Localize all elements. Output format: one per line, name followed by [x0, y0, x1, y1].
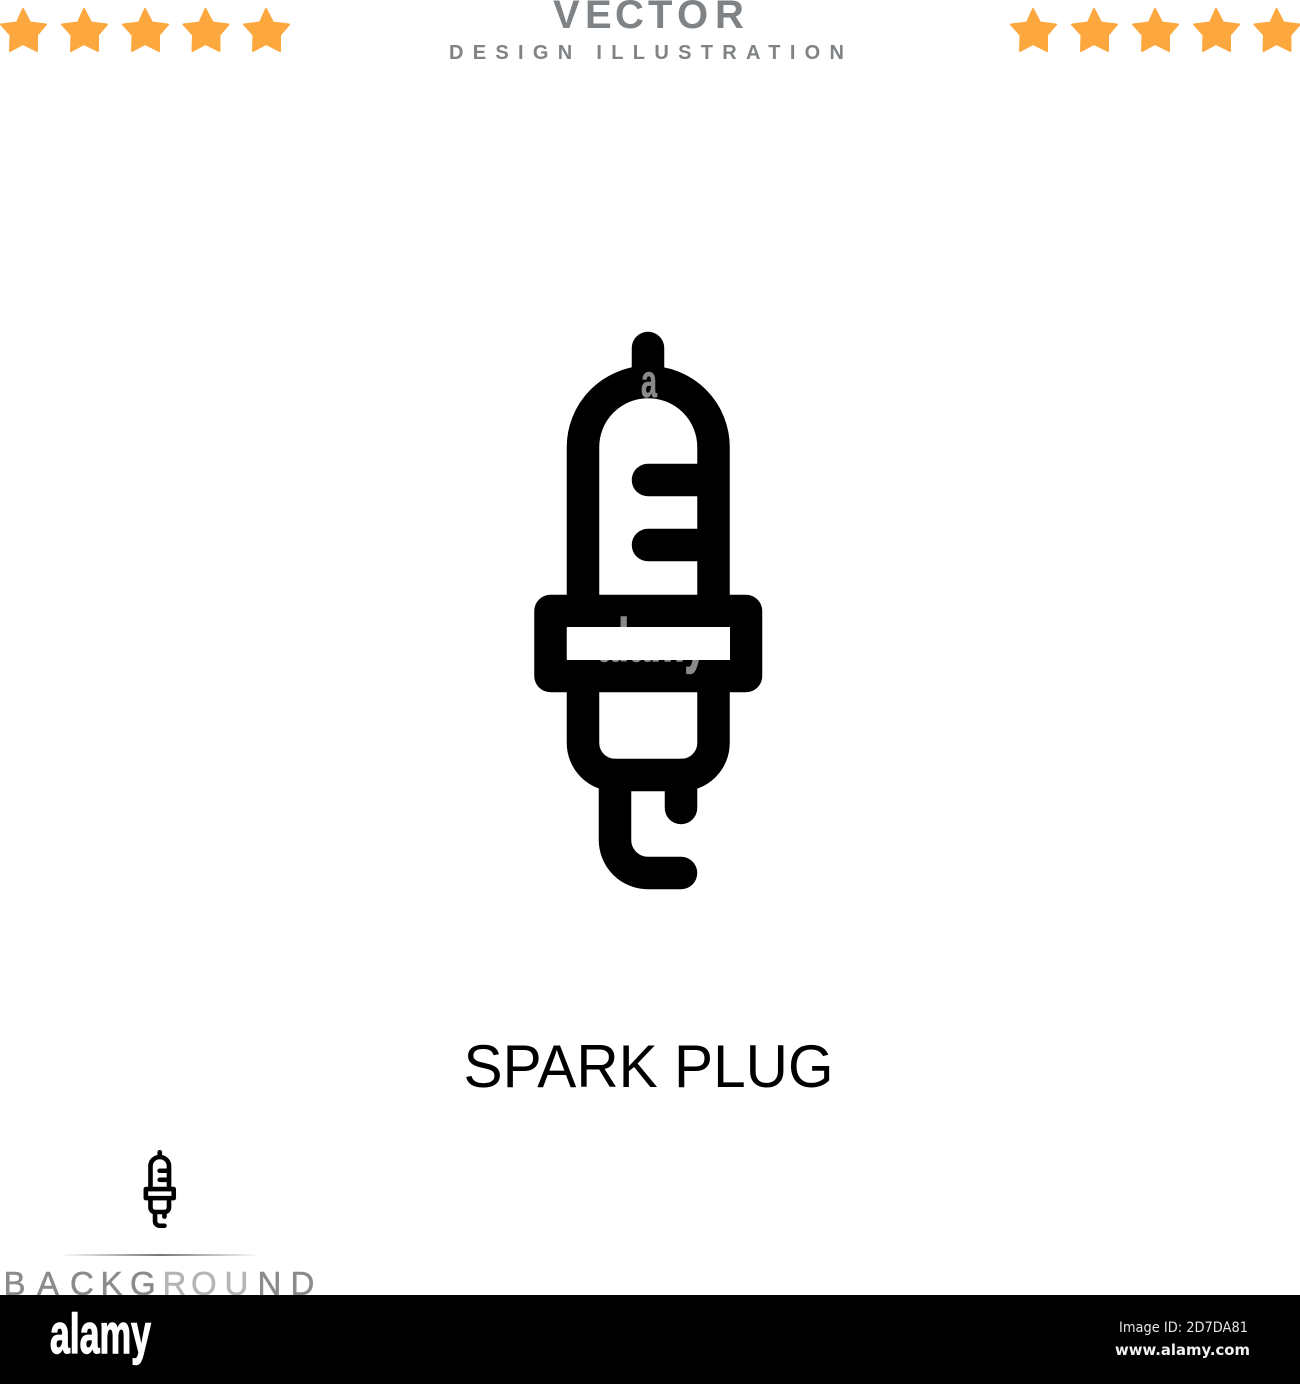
left star rating [1, 9, 289, 51]
watermark: alamy over icon: alamy [597, 607, 706, 674]
main label: SPARK PLUG [464, 1033, 834, 1100]
watermark: alamy over icon [567, 355, 730, 674]
background label: BACKGROU ND [4, 1265, 314, 1302]
icon: large spark plug [550, 348, 746, 873]
right star rating [1011, 9, 1300, 51]
header title: DESIGN ILLUSTRATION [449, 42, 844, 64]
icon: small spark plug [146, 1152, 174, 1226]
image id: Image ID: 2D7DA81 [1119, 1320, 1248, 1336]
watermark: alamy over icon: a [641, 355, 657, 407]
footer bar [0, 1295, 1300, 1384]
footer logo: alamy: alamy [50, 1302, 151, 1365]
header title [449, 0, 844, 64]
website: www.alamy.com [1115, 1341, 1250, 1359]
divider line [60, 1254, 260, 1256]
